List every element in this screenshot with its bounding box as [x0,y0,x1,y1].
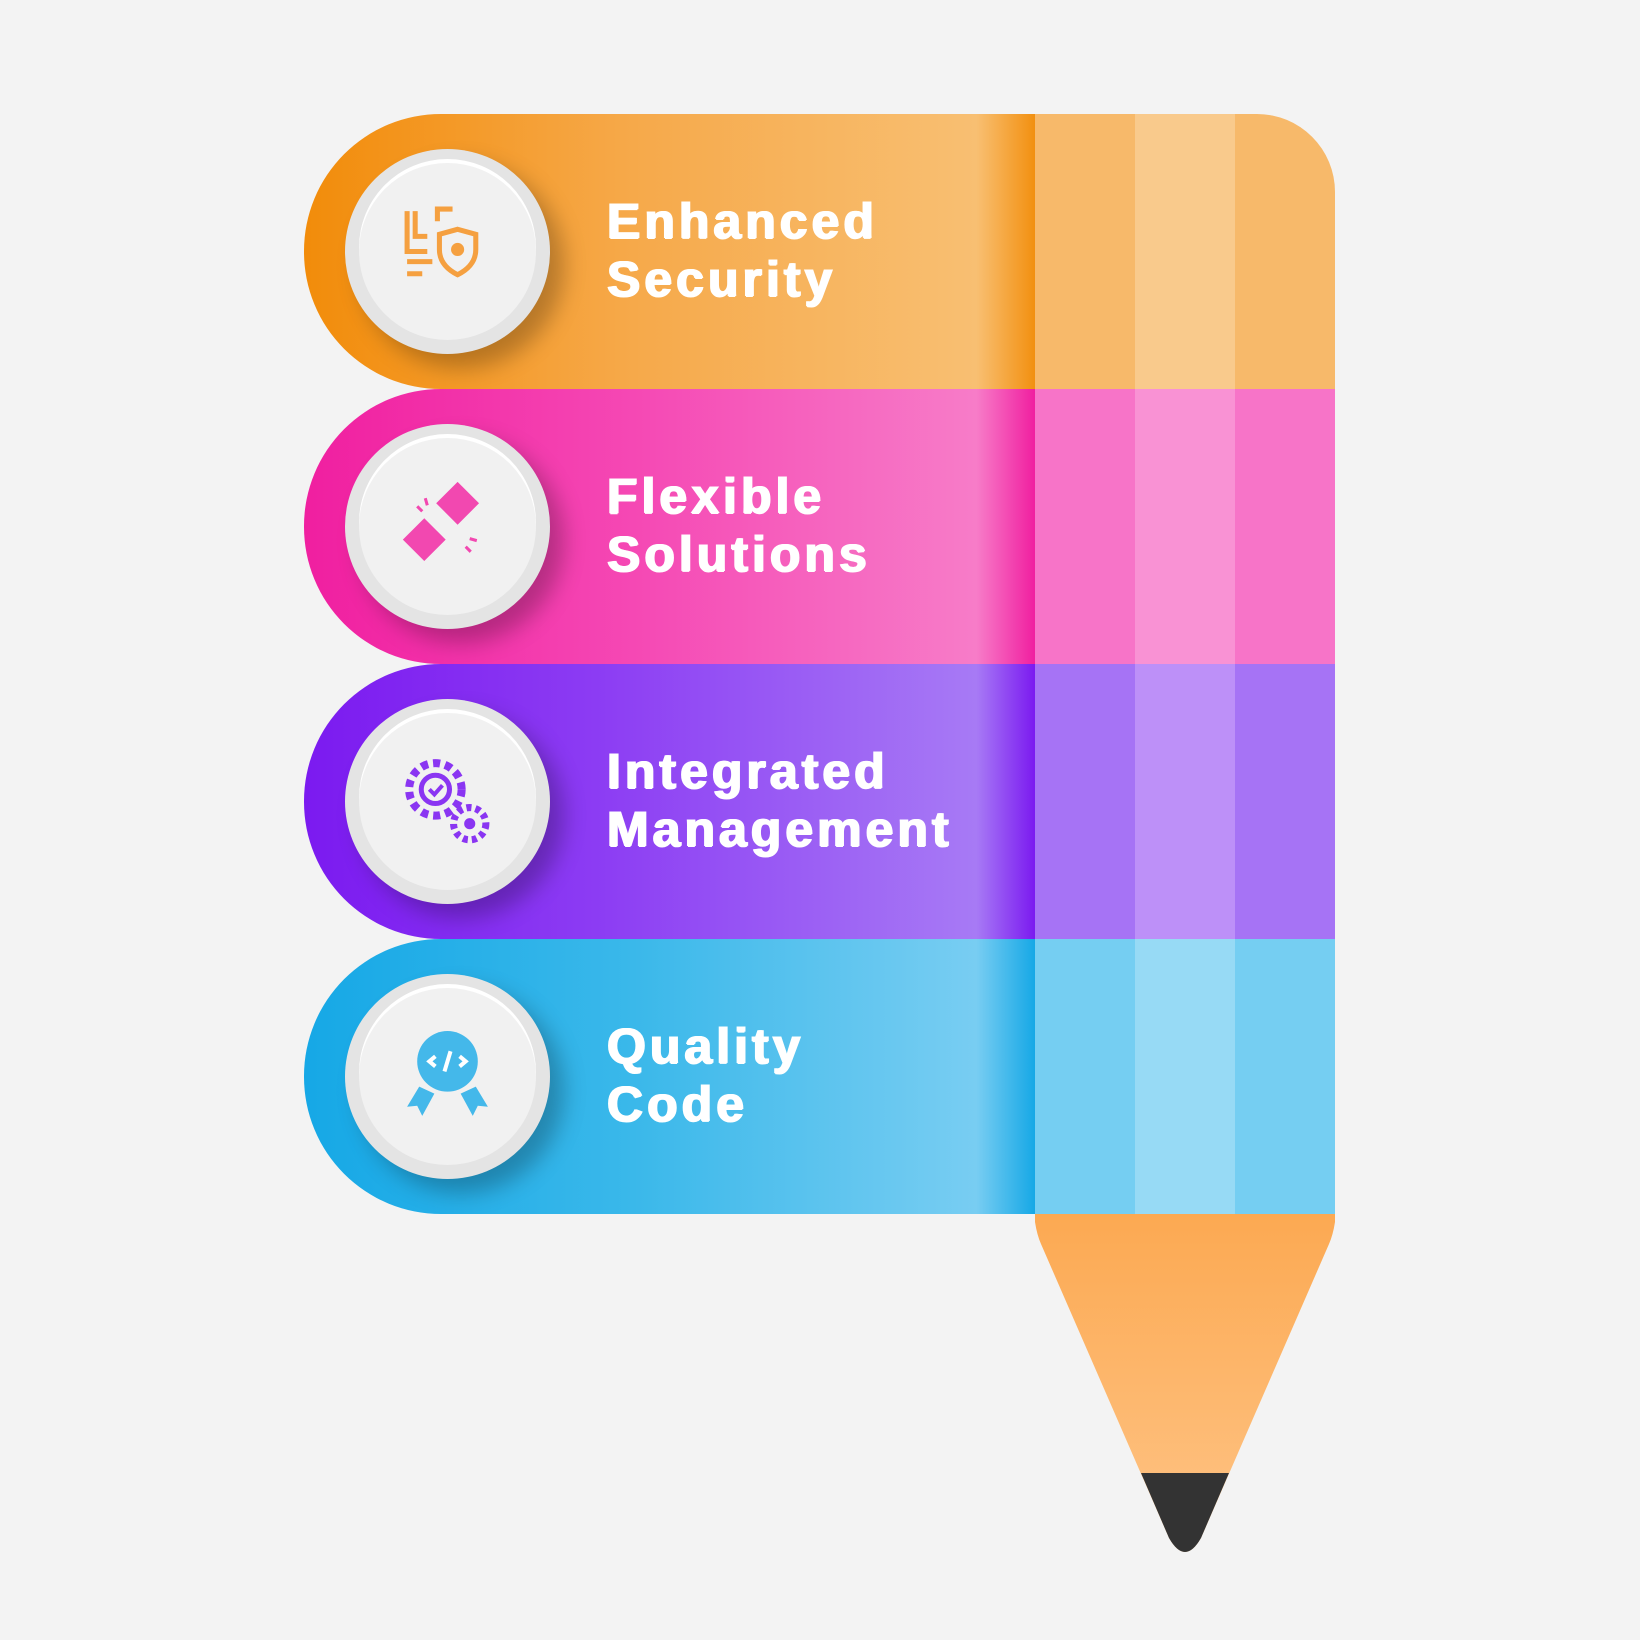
text: Quality [607,1018,804,1074]
pencil body: pink [1035,389,1335,664]
icon: code badge [345,974,550,1179]
icon: security circuit shield [345,149,550,354]
text [607,743,953,858]
row: enhanced security [304,114,1335,389]
text: Solutions [607,526,871,582]
text: Code [607,1076,748,1132]
pencil body: blue [1035,939,1335,1214]
text: Flexible [607,468,825,524]
band: orange [304,114,1035,389]
band: purple [304,664,1035,939]
text: Management [607,801,953,857]
text: Security [607,251,836,307]
icon: puzzle [345,424,550,629]
text [607,468,871,582]
row: integrated management [304,664,1335,939]
pencil body: orange [1035,114,1335,389]
text [607,193,878,308]
band: pink [304,389,1035,664]
icon: gears [345,699,550,904]
row: flexible solutions [304,389,1335,664]
text: Integrated [607,743,889,799]
band: blue [304,939,1035,1214]
pencil body: purple [1035,664,1335,939]
row: quality code [304,939,1335,1214]
text: Enhanced [607,193,878,249]
text [607,1018,804,1132]
